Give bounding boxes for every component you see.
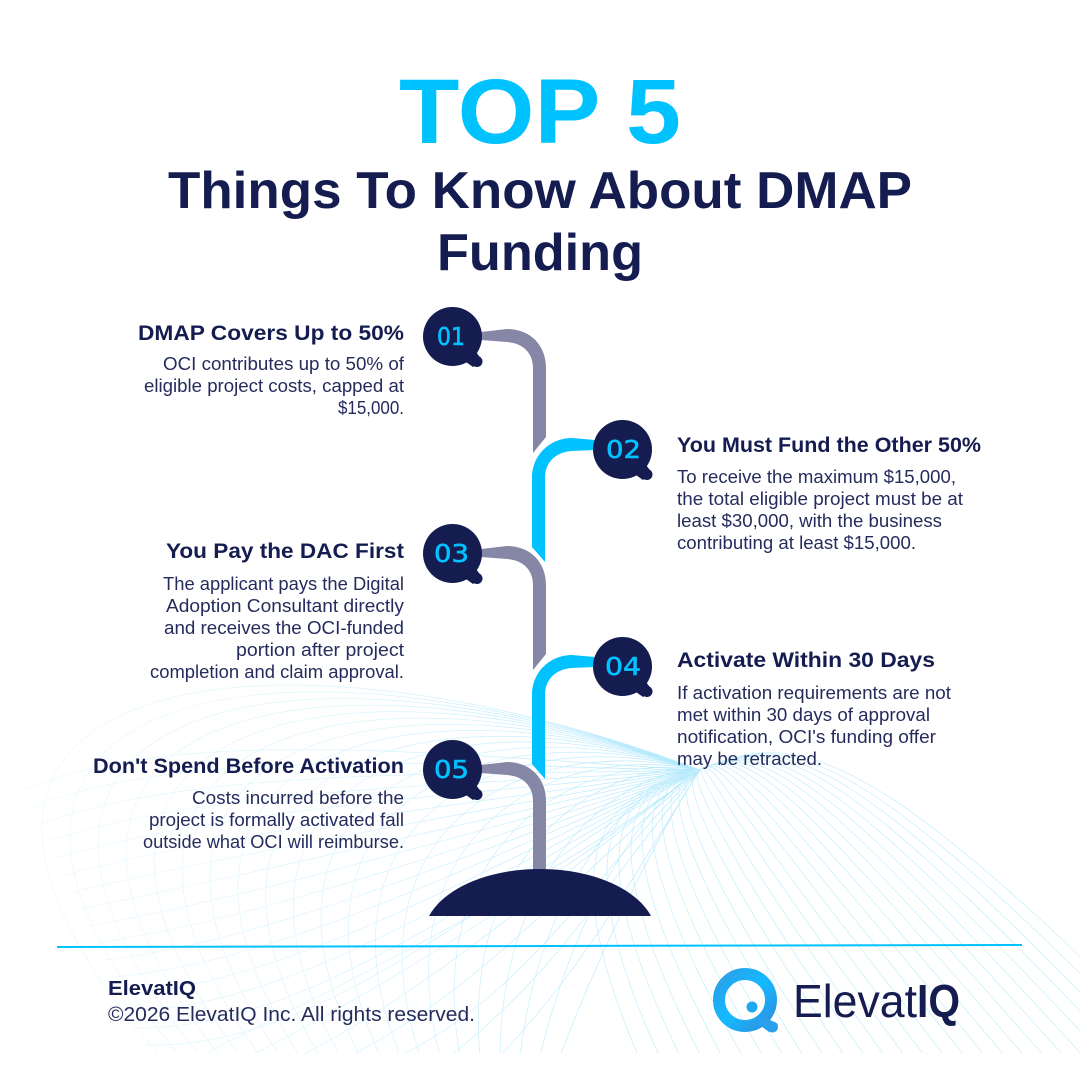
item 2 text: You Must Fund the Other 50% xyxy=(677,434,981,457)
badge 01 xyxy=(423,307,482,367)
logo: Elevat xyxy=(793,975,917,1027)
footer text xyxy=(108,978,475,1026)
item 3 text: You Pay the DAC First xyxy=(166,540,404,563)
item 1 text: eligible project costs, capped at xyxy=(144,376,404,396)
footer line xyxy=(57,945,1022,947)
item 1 text: $15,000. xyxy=(338,398,404,418)
item 5 text: Don't Spend Before Activation xyxy=(93,755,404,778)
item 3 text xyxy=(150,540,404,682)
item 3 text: and receives the OCI-funded xyxy=(164,618,404,638)
badge 03: 03 xyxy=(434,539,469,568)
item 3 text: portion after project xyxy=(236,640,404,660)
item 4 text: If activation requirements are not xyxy=(677,683,951,703)
item 5 text: project is formally activated fall xyxy=(149,810,404,830)
badge 02 xyxy=(593,420,652,480)
badge 05 xyxy=(423,740,482,800)
item 3 text: completion and claim approval. xyxy=(150,662,404,682)
badge 05: 05 xyxy=(434,755,469,784)
item 4 text: met within 30 days of approval xyxy=(677,705,930,725)
base dome xyxy=(429,869,651,916)
item 5 text: outside what OCI will reimburse. xyxy=(143,832,404,852)
item 1 text: DMAP Covers Up to 50% xyxy=(138,322,404,345)
item 2 text: least $30,000, with the business xyxy=(677,511,942,531)
logo xyxy=(719,974,960,1032)
item 4 text: Activate Within 30 Days xyxy=(677,649,935,672)
stem 3 xyxy=(481,546,546,670)
stem 2 xyxy=(532,438,595,562)
subtitle: Funding xyxy=(437,224,643,282)
item 4 text xyxy=(677,649,951,769)
badge 03 xyxy=(423,524,482,584)
item 3 text: Adoption Consultant directly xyxy=(166,596,404,616)
subtitle: Things To Know About DMAP xyxy=(168,162,912,220)
badge 04: 04 xyxy=(605,652,641,681)
item 5 text: Costs incurred before the xyxy=(192,788,404,808)
item 4 text: may be retracted. xyxy=(677,749,822,769)
item 4 text: notification, OCI's funding offer xyxy=(677,727,936,747)
logo: IQ xyxy=(917,975,960,1027)
item 5 text xyxy=(93,755,404,852)
stem 1 xyxy=(481,329,546,453)
stem 4 xyxy=(532,655,595,779)
title: TOP 5: TOP 5 xyxy=(399,61,681,163)
badge 01: 01 xyxy=(437,322,465,351)
badge 04 xyxy=(593,637,652,697)
badge 02: 02 xyxy=(606,435,641,464)
item 2 text: To receive the maximum $15,000, xyxy=(677,467,956,487)
item 1 text: OCI contributes up to 50% of xyxy=(163,354,405,374)
footer text: ©2026 ElevatIQ Inc. All rights reserved. xyxy=(108,1004,475,1026)
subtitle xyxy=(168,162,912,282)
item 2 text: the total eligible project must be at xyxy=(677,489,963,509)
item 3 text: The applicant pays the Digital xyxy=(163,574,404,594)
stem 5 xyxy=(481,762,546,875)
item 2 text: contributing at least $15,000. xyxy=(677,533,916,553)
footer text: ElevatIQ xyxy=(108,978,196,1000)
item 1 text xyxy=(138,322,405,418)
item 2 text xyxy=(677,434,981,553)
